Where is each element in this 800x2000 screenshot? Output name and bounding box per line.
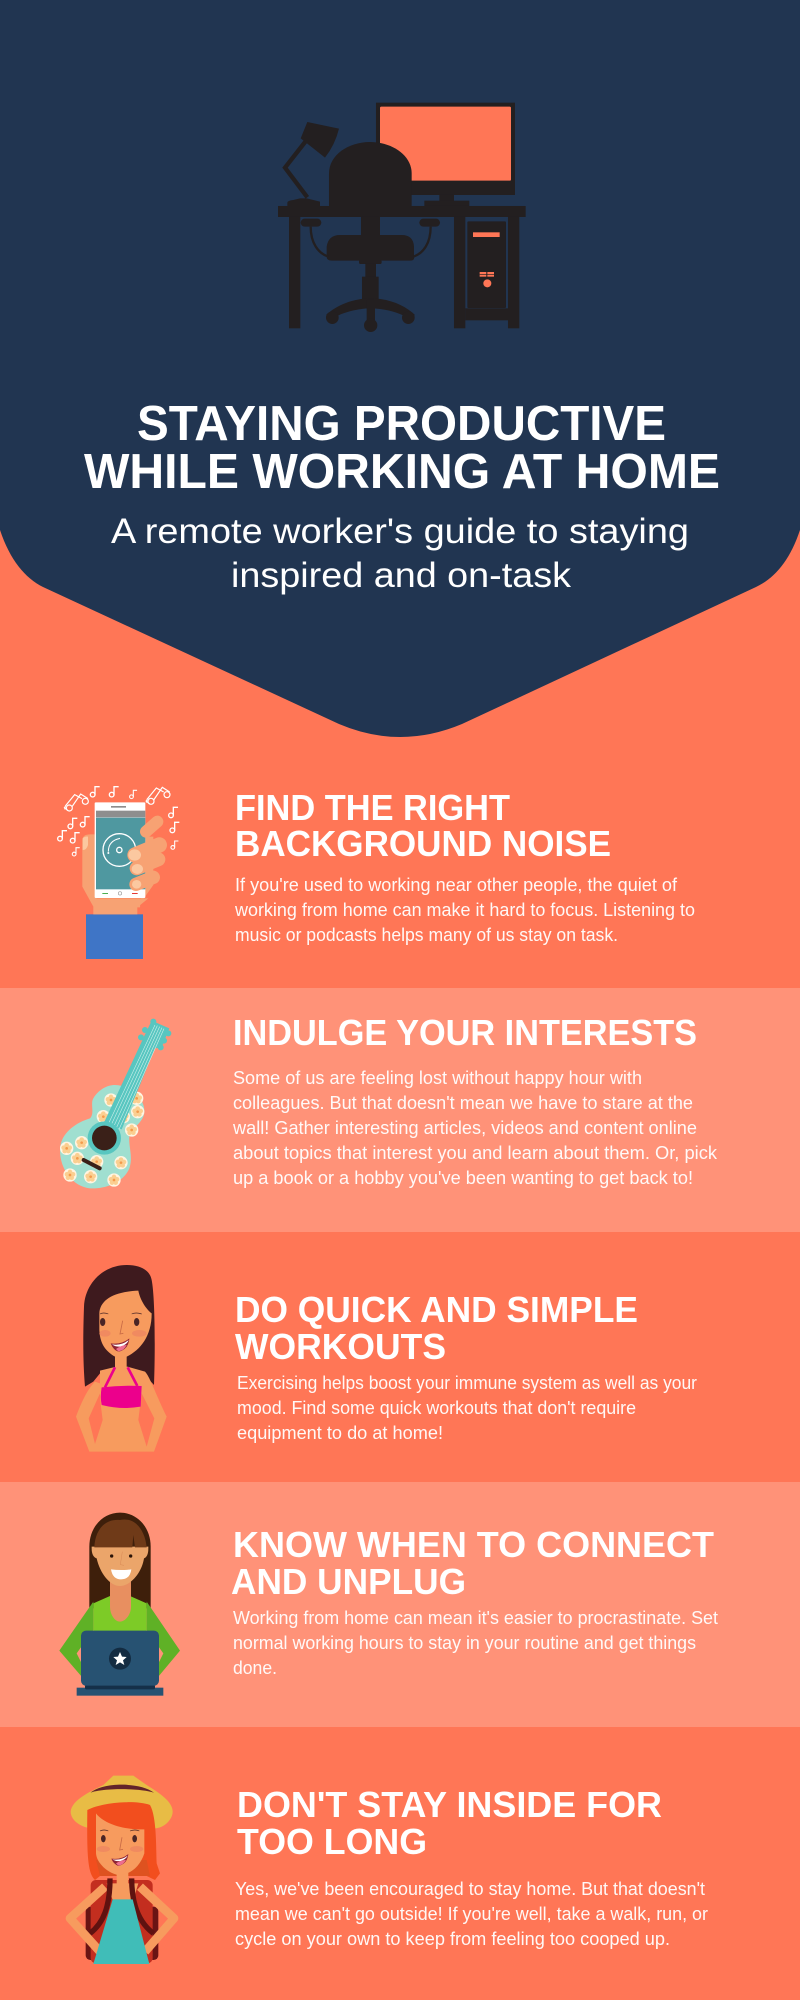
heading: WORKOUTS <box>235 1326 446 1367</box>
body text: working from home can make it hard to focus. Listening to <box>234 900 695 920</box>
heading: TOO LONG <box>237 1821 427 1862</box>
body text: Some of us are feeling lost without happy hour with <box>233 1068 642 1088</box>
icon: woman in pink top <box>76 1265 167 1452</box>
body text: normal working hours to stay in your routine and get things <box>233 1633 696 1653</box>
subtitle: inspired and on-task <box>231 556 572 595</box>
panel: indulge your interests <box>0 988 800 1232</box>
body text: wall! Gather interesting articles, videos and content online <box>232 1118 697 1138</box>
body text: Yes, we've been encouraged to stay home. But that doesn't <box>235 1879 705 1899</box>
body text: colleagues. But that doesn't mean we have to stare at the <box>233 1093 693 1113</box>
body text: music or podcasts helps many of us stay on task. <box>235 925 618 945</box>
panel: know when to connect and unplug <box>0 1482 800 1727</box>
icon: woman with hat and backpack <box>70 1776 174 1964</box>
body text: mood. Find some quick workouts that don't require <box>237 1398 636 1418</box>
heading: INDULGE YOUR INTERESTS <box>233 1012 697 1053</box>
title: STAYING PRODUCTIVE <box>137 397 666 451</box>
icon: guitar <box>60 1019 171 1188</box>
heading <box>231 1524 714 1602</box>
body text: up a book or a hobby you've been wanting to get back to! <box>233 1168 693 1188</box>
body text: Working from home can mean it's easier to procrastinate. Set <box>233 1608 718 1628</box>
body text <box>235 1879 708 1949</box>
heading: AND UNPLUG <box>231 1561 466 1602</box>
title: WHILE WORKING AT HOME <box>84 445 720 499</box>
body text <box>233 1608 718 1678</box>
body text: done. <box>233 1658 277 1678</box>
heading <box>235 787 611 864</box>
icon: woman with laptop <box>59 1513 180 1696</box>
subtitle <box>111 512 689 595</box>
heading: DO QUICK AND SIMPLE <box>235 1289 638 1330</box>
body text <box>232 1068 718 1188</box>
heading: DON'T STAY INSIDE FOR <box>237 1784 662 1825</box>
panel: find the right background noise <box>0 760 800 988</box>
panel: don't stay inside for too long <box>0 1727 800 2000</box>
body text: cycle on your own to keep from feeling too cooped up. <box>235 1929 670 1949</box>
body text: equipment to do at home! <box>237 1423 443 1443</box>
icon: hand holding phone with music notes <box>58 787 179 959</box>
body text: mean we can't go outside! If you're well, take a walk, run, or <box>235 1904 708 1924</box>
icon: desk, chair, lamp and computer <box>278 103 526 332</box>
title <box>84 397 720 499</box>
heading: FIND THE RIGHT <box>235 787 510 828</box>
panel: do quick and simple workouts <box>0 1232 800 1482</box>
body text: If you're used to working near other people, the quiet of <box>235 875 678 895</box>
body text: Exercising helps boost your immune system as well as your <box>237 1373 697 1393</box>
heading <box>235 1289 638 1367</box>
body text <box>234 875 695 945</box>
subtitle: A remote worker's guide to staying <box>111 512 689 551</box>
heading: KNOW WHEN TO CONNECT <box>233 1524 714 1565</box>
body text: about topics that interest you and learn about them. Or, pick <box>233 1143 718 1163</box>
heading <box>237 1784 662 1862</box>
body text <box>237 1373 697 1443</box>
heading: BACKGROUND NOISE <box>235 823 611 864</box>
header shape <box>0 0 800 737</box>
panel: header <box>0 0 800 737</box>
